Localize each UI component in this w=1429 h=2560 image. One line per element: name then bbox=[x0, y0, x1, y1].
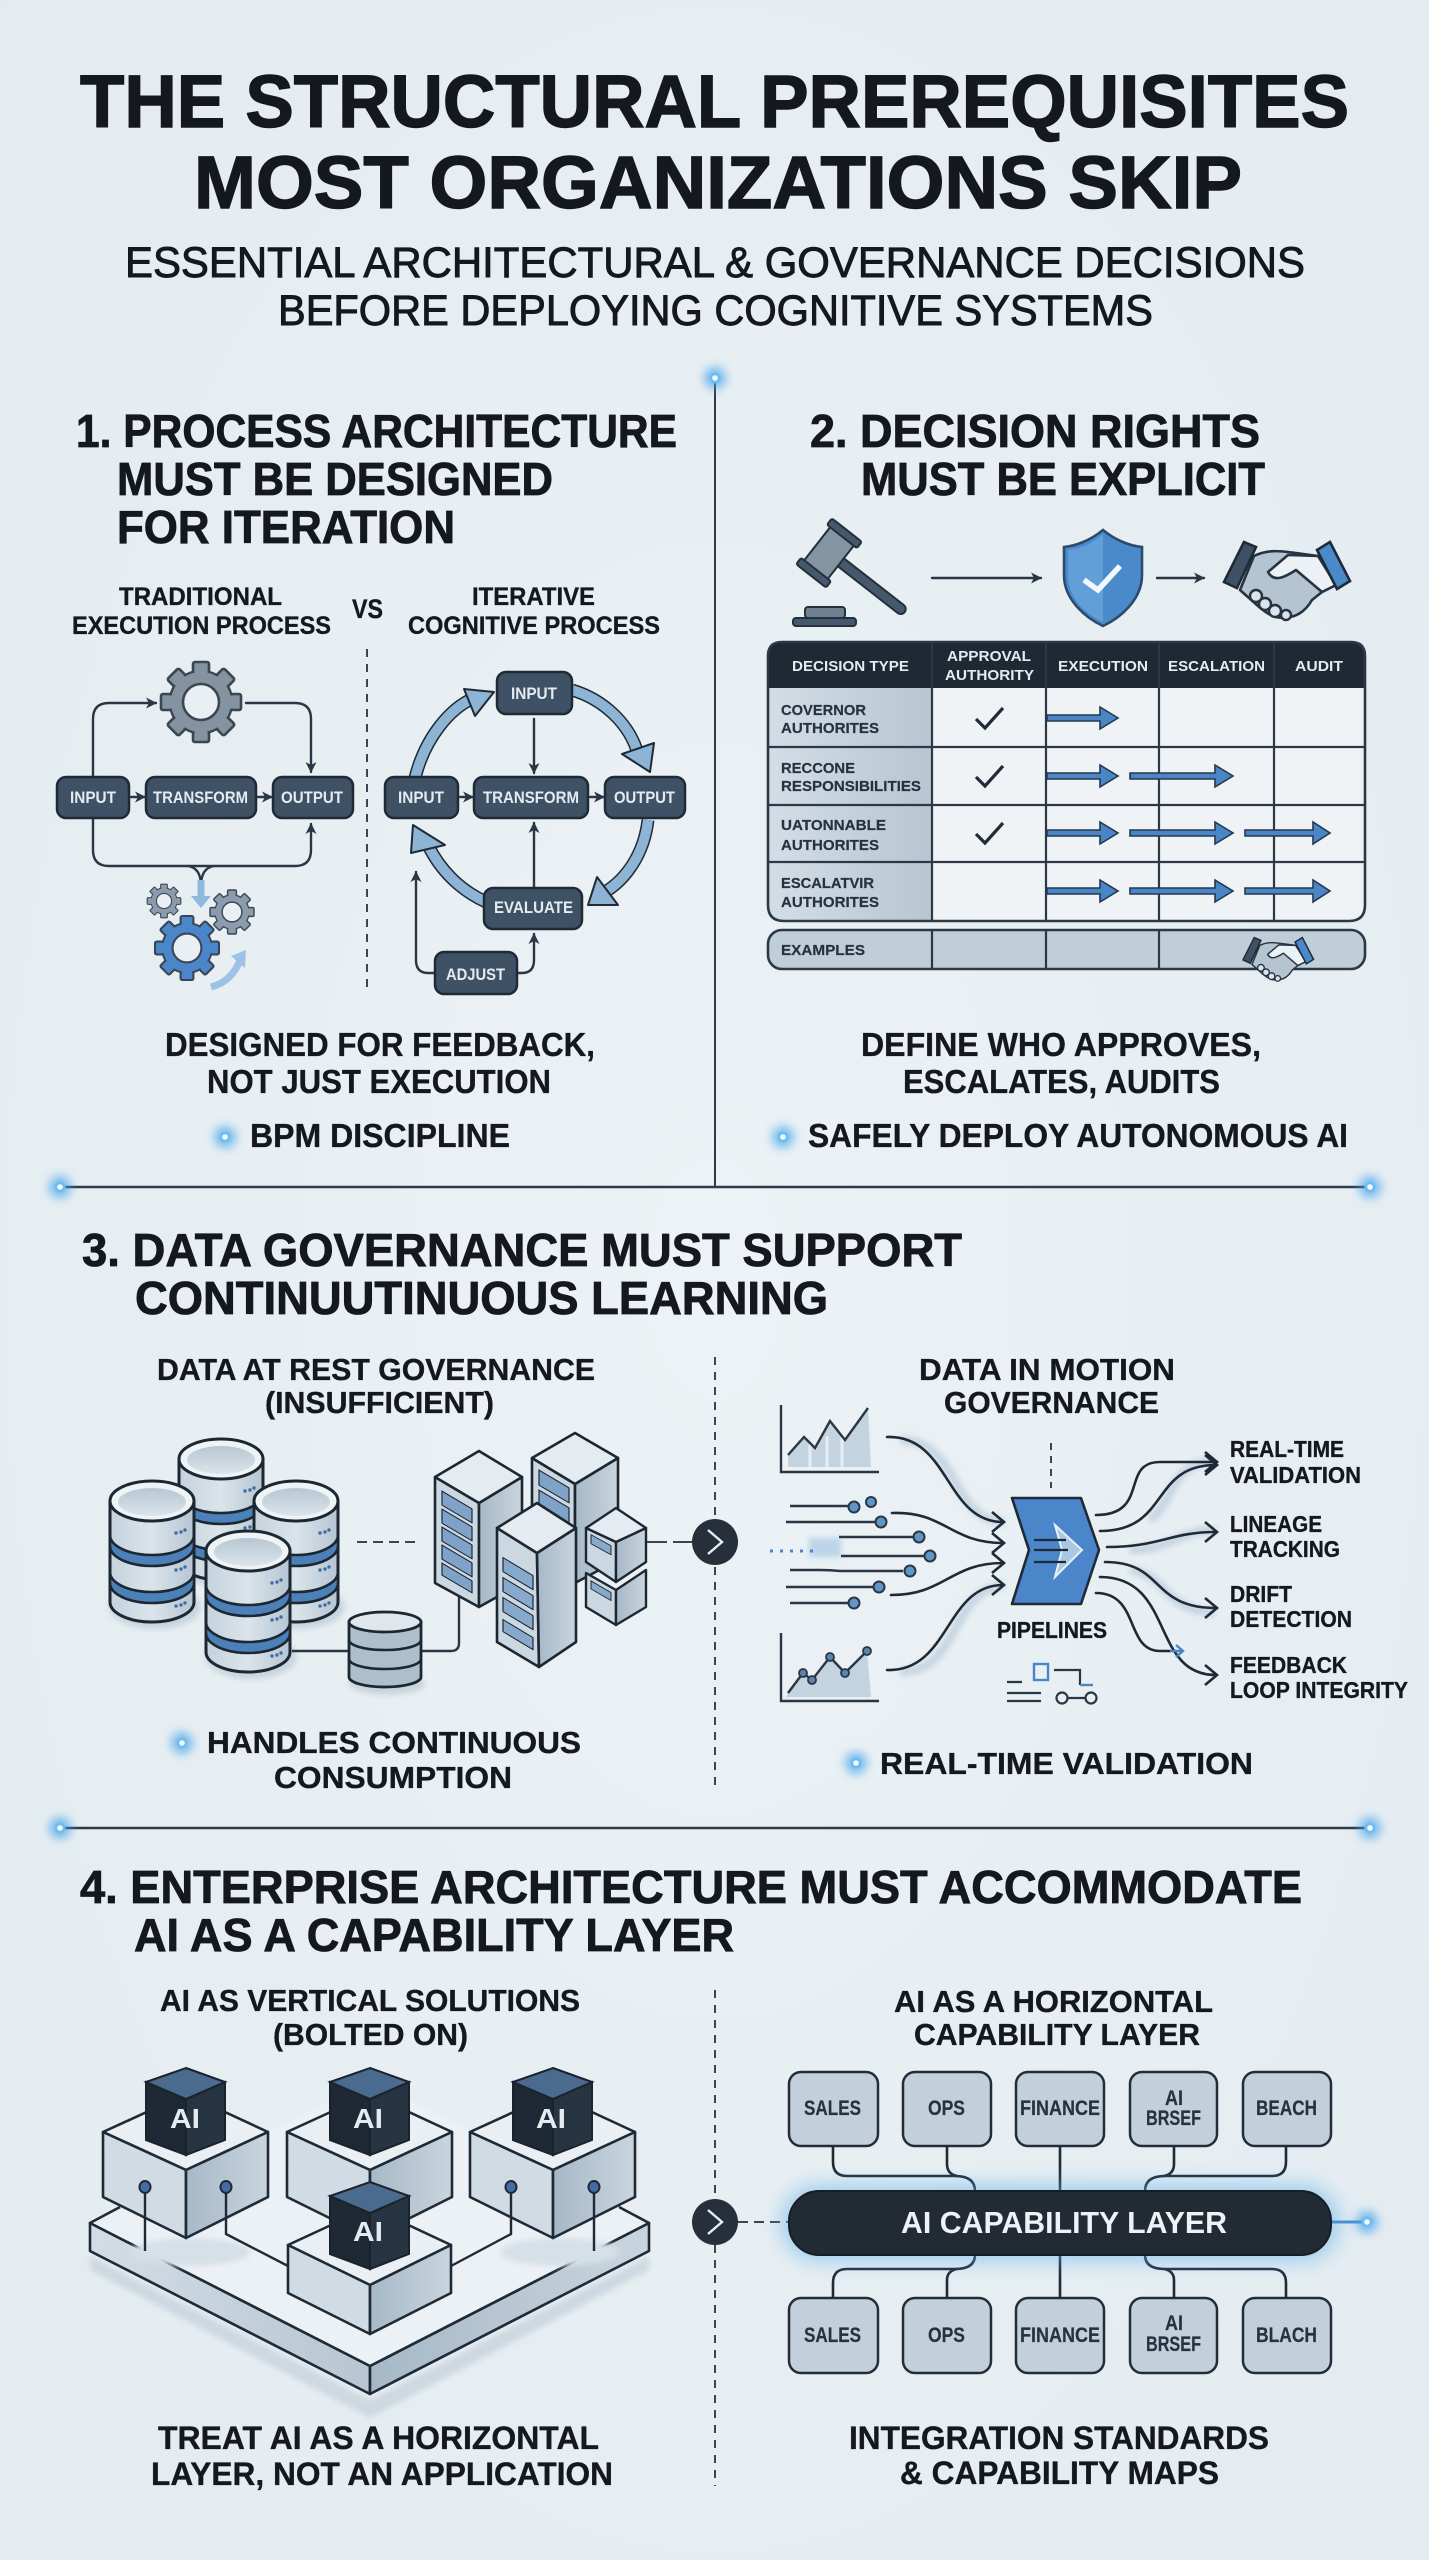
box: input top: INPUT bbox=[511, 684, 558, 703]
server E small bbox=[586, 1570, 646, 1625]
table header row: DECISION TYPE bbox=[792, 658, 909, 675]
label: data in motion governance: DATA IN MOTION bbox=[919, 1352, 1175, 1387]
icon: small handshake bbox=[1243, 938, 1314, 981]
heading: section 4: AI AS A CAPABILITY LAYER bbox=[134, 1909, 734, 1961]
takeaway: treat AI as horizontal layer: TREAT AI AS A HORIZONTAL bbox=[158, 2420, 599, 2456]
labels: data in motion outcomes: LOOP INTEGRITY bbox=[1230, 1677, 1408, 1703]
subtitle bbox=[125, 239, 1305, 335]
subtitle: ESSENTIAL ARCHITECTURAL & GOVERNANCE DECISIONS bbox=[125, 239, 1305, 287]
table row labels bbox=[781, 702, 921, 911]
box: input bbox=[57, 777, 129, 818]
panel: section 1 process architecture bbox=[57, 405, 685, 1154]
table flow arrows bbox=[1047, 707, 1330, 902]
panel: section 3 data governance bbox=[82, 1224, 1408, 1795]
labels: data in motion outcomes: LINEAGE bbox=[1230, 1511, 1322, 1537]
label: AI as vertical solutions bbox=[160, 1983, 580, 2052]
takeaway: integration standards: & CAPABILITY MAPS bbox=[900, 2455, 1219, 2491]
heading: section 4 bbox=[80, 1861, 1302, 1961]
takeaway: integration standards bbox=[849, 2420, 1269, 2491]
box: sales bbox=[789, 2298, 878, 2373]
label: data at rest governance: (INSUFFICIENT) bbox=[265, 1385, 494, 1420]
flow lines: into pipeline bbox=[887, 1437, 1004, 1672]
label: traditional execution process bbox=[72, 583, 331, 640]
connectors: departments to layer bbox=[833, 2146, 1286, 2298]
arrow: rest to motion bbox=[647, 1519, 738, 1565]
box: sales: SALES bbox=[804, 2324, 861, 2347]
box: transform centre: TRANSFORM bbox=[483, 788, 579, 807]
callout: handles continuous consumption: CONSUMPTION bbox=[274, 1760, 512, 1795]
box: output: OUTPUT bbox=[281, 788, 344, 807]
takeaway: section 1: NOT JUST EXECUTION bbox=[207, 1063, 551, 1100]
block: AI left bbox=[103, 2068, 268, 2238]
table: decision rights matrix bbox=[768, 642, 1365, 921]
takeaway: treat AI as horizontal layer: LAYER, NOT AN APPLICATION bbox=[151, 2456, 613, 2492]
block: AI front: AI bbox=[353, 2216, 383, 2247]
label: iterative cognitive process bbox=[408, 583, 660, 640]
AI capability layer bar: AI CAPABILITY LAYER bbox=[901, 2205, 1227, 2240]
title bbox=[80, 60, 1349, 224]
icon: gear bbox=[161, 662, 241, 742]
table row labels: RECCONE bbox=[781, 760, 855, 777]
callout: handles continuous consumption bbox=[171, 1725, 581, 1795]
box: output bbox=[273, 777, 353, 818]
icon: small pipeline schematic bbox=[1007, 1664, 1096, 1704]
table header row: AUTHORITY bbox=[945, 667, 1034, 684]
block: AI centre: AI bbox=[353, 2103, 383, 2134]
platform bbox=[90, 2080, 649, 2394]
box: transform centre bbox=[474, 777, 588, 818]
data streams: input nodes bbox=[770, 1497, 936, 1608]
box: beach: BEACH bbox=[1256, 2097, 1317, 2120]
arrow: vertical to horizontal bbox=[692, 2199, 789, 2245]
box: input left: INPUT bbox=[398, 788, 445, 807]
takeaway: integration standards: INTEGRATION STANDARDS bbox=[849, 2420, 1269, 2456]
takeaway: treat AI as horizontal layer bbox=[151, 2420, 613, 2492]
arrow: gavel to shield bbox=[932, 577, 1041, 579]
label: iterative cognitive process: ITERATIVE bbox=[472, 583, 595, 611]
box: beach bbox=[1243, 2072, 1331, 2146]
AI capability layer bar bbox=[782, 2186, 1378, 2260]
label: data in motion governance: GOVERNANCE bbox=[944, 1385, 1159, 1420]
box: ops: OPS bbox=[928, 2324, 965, 2347]
illustration: isometric platform with AI blocks bbox=[90, 2068, 649, 2418]
box: input: INPUT bbox=[70, 788, 117, 807]
heading: section 3: CONTINUUTINUOUS LEARNING bbox=[135, 1272, 828, 1324]
table row labels: ESCALATVIR bbox=[781, 875, 874, 892]
block: AI front bbox=[288, 2182, 451, 2334]
box: input left bbox=[385, 777, 458, 818]
table header row: EXECUTION bbox=[1058, 658, 1148, 675]
icon: pipeline chevron bbox=[1012, 1498, 1099, 1604]
arrow: shield to handshake bbox=[1157, 577, 1204, 579]
label: AI as vertical solutions: (BOLTED ON) bbox=[273, 2017, 468, 2052]
labels: data in motion outcomes bbox=[1230, 1436, 1408, 1703]
table: examples row: EXAMPLES bbox=[781, 942, 865, 959]
icon: gavel bbox=[793, 518, 923, 635]
table row labels: UATONNABLE bbox=[781, 817, 886, 834]
label: pipelines: PIPELINES bbox=[997, 1617, 1107, 1643]
takeaway: section 1 bbox=[165, 1026, 595, 1100]
label: traditional execution process: TRADITIONAL bbox=[119, 583, 282, 611]
callout: BPM discipline: BPM DISCIPLINE bbox=[250, 1117, 510, 1154]
box: adjust bbox=[435, 952, 517, 994]
box: ops bbox=[903, 2072, 991, 2146]
box: AI brsef: AI bbox=[1165, 2087, 1183, 2110]
title: MOST ORGANIZATIONS SKIP bbox=[194, 141, 1242, 224]
box: finance: FINANCE bbox=[1020, 2324, 1100, 2347]
bottom row department boxes bbox=[789, 2298, 1331, 2373]
table check marks bbox=[976, 708, 1003, 843]
label: data at rest governance: DATA AT REST GOVERNANCE bbox=[157, 1352, 595, 1387]
table row labels: AUTHORITES bbox=[781, 837, 879, 854]
box: sales bbox=[789, 2072, 878, 2146]
illustration: database cylinders bbox=[109, 1439, 459, 1695]
arrows: iterative cycle bbox=[411, 689, 654, 905]
table row labels: RESPONSIBILITIES bbox=[781, 778, 921, 795]
diagram: traditional process bbox=[57, 662, 353, 987]
takeaway: section 1: DESIGNED FOR FEEDBACK, bbox=[165, 1026, 595, 1063]
box: AI brsef: BRSEF bbox=[1146, 2333, 1201, 2356]
callout: safely deploy autonomous AI: SAFELY DEPLOY AUTONOMOUS AI bbox=[808, 1117, 1348, 1154]
panel: section 2 decision rights bbox=[768, 405, 1365, 1154]
box: blach: BLACH bbox=[1256, 2324, 1317, 2347]
top row department boxes bbox=[789, 2072, 1331, 2146]
box: evaluate bbox=[484, 888, 582, 929]
chart: area bars trend bbox=[781, 1405, 879, 1472]
block: AI left: AI bbox=[170, 2103, 200, 2134]
table header row bbox=[792, 648, 1343, 684]
icon: shield bbox=[1064, 530, 1142, 626]
label: iterative cognitive process: COGNITIVE PROCESS bbox=[408, 612, 660, 640]
labels: data in motion outcomes: REAL-TIME bbox=[1230, 1436, 1344, 1462]
box: AI brsef bbox=[1130, 2298, 1217, 2373]
panel: section 4 enterprise architecture bbox=[80, 1861, 1378, 2492]
table: examples row bbox=[768, 930, 1365, 981]
heading: section 4: 4. ENTERPRISE ARCHITECTURE MUST ACCOMMODATE bbox=[80, 1861, 1302, 1913]
connectors bbox=[145, 2187, 594, 2266]
diagram: iterative process bbox=[385, 672, 685, 994]
heading: section 1: MUST BE DESIGNED bbox=[117, 453, 553, 505]
title: THE STRUCTURAL PREREQUISITES bbox=[80, 60, 1349, 143]
heading: section 1: FOR ITERATION bbox=[117, 501, 455, 553]
label: AI as horizontal capability layer bbox=[894, 1984, 1213, 2052]
box: output right bbox=[605, 777, 685, 818]
heading: section 1: 1. PROCESS ARCHITECTURE bbox=[76, 405, 677, 457]
table row labels: AUTHORITES bbox=[781, 720, 879, 737]
labels: data in motion outcomes: FEEDBACK bbox=[1230, 1652, 1347, 1678]
label: AI as vertical solutions: AI AS VERTICAL SOLUTIONS bbox=[160, 1983, 580, 2018]
grid dividers with glowing nodes bbox=[49, 367, 1381, 1839]
box: AI brsef: BRSEF bbox=[1146, 2107, 1201, 2130]
heading: section 2: MUST BE EXPLICIT bbox=[861, 453, 1265, 505]
chart: line with points bbox=[781, 1633, 879, 1701]
illustration: server racks bbox=[435, 1433, 646, 1667]
block: AI right bbox=[470, 2068, 635, 2238]
label: traditional execution process: EXECUTION PROCESS bbox=[72, 612, 331, 640]
box: ops: OPS bbox=[928, 2097, 965, 2120]
callout: real-time validation: REAL-TIME VALIDATION bbox=[880, 1746, 1253, 1781]
icon: gear cluster bbox=[147, 884, 254, 987]
labels: data in motion outcomes: DRIFT bbox=[1230, 1581, 1292, 1607]
box: finance: FINANCE bbox=[1020, 2097, 1100, 2120]
labels: data in motion outcomes: TRACKING bbox=[1230, 1536, 1340, 1562]
heading: section 3: 3. DATA GOVERNANCE MUST SUPPORT bbox=[82, 1224, 962, 1276]
icon: small database bbox=[349, 1612, 425, 1695]
box: finance bbox=[1016, 2298, 1104, 2373]
box: output right: OUTPUT bbox=[614, 788, 676, 807]
heading: section 3 bbox=[82, 1224, 962, 1324]
heading: section 1 bbox=[76, 405, 677, 553]
box: transform: TRANSFORM bbox=[153, 788, 248, 807]
box: finance bbox=[1016, 2072, 1104, 2146]
takeaway: section 2: DEFINE WHO APPROVES, bbox=[861, 1026, 1261, 1063]
icon: handshake bbox=[1224, 542, 1350, 620]
server A bbox=[435, 1451, 522, 1607]
server C front bbox=[497, 1503, 576, 1667]
block: AI centre bbox=[287, 2068, 452, 2238]
table header row: AUDIT bbox=[1295, 658, 1343, 675]
label: vs: VS bbox=[352, 594, 383, 624]
table row labels: COVERNOR bbox=[781, 702, 866, 719]
subtitle: BEFORE DEPLOYING COGNITIVE SYSTEMS bbox=[278, 287, 1153, 335]
box: evaluate: EVALUATE bbox=[494, 898, 573, 917]
box: blach bbox=[1243, 2298, 1331, 2373]
label: data in motion governance bbox=[919, 1352, 1175, 1420]
table header row: ESCALATION bbox=[1168, 658, 1265, 675]
label: AI as horizontal capability layer: AI AS A HORIZONTAL bbox=[894, 1984, 1213, 2019]
box: adjust: ADJUST bbox=[446, 965, 506, 984]
box: ops bbox=[903, 2298, 991, 2373]
heading: section 2: 2. DECISION RIGHTS bbox=[810, 405, 1260, 457]
flow lines: out of pipeline bbox=[1096, 1462, 1216, 1675]
labels: data in motion outcomes: DETECTION bbox=[1230, 1606, 1352, 1632]
table header row: APPROVAL bbox=[947, 648, 1031, 665]
takeaway: section 2: ESCALATES, AUDITS bbox=[903, 1063, 1220, 1100]
box: input top bbox=[497, 672, 572, 714]
label: AI as horizontal capability layer: CAPABILITY LAYER bbox=[914, 2017, 1200, 2052]
heading: section 2 bbox=[810, 405, 1265, 505]
table row labels: AUTHORITES bbox=[781, 894, 879, 911]
labels: data in motion outcomes: VALIDATION bbox=[1230, 1462, 1361, 1488]
label: data at rest governance bbox=[157, 1352, 595, 1420]
callout: handles continuous consumption: HANDLES CONTINUOUS bbox=[207, 1725, 581, 1760]
box: AI brsef bbox=[1130, 2072, 1217, 2146]
server B back bbox=[532, 1433, 618, 1583]
box: transform bbox=[146, 777, 256, 818]
server D small bbox=[586, 1508, 646, 1582]
takeaway: section 2 bbox=[861, 1026, 1261, 1100]
box: AI brsef: AI bbox=[1165, 2312, 1183, 2335]
block: AI right: AI bbox=[536, 2103, 566, 2134]
box: sales: SALES bbox=[804, 2097, 861, 2120]
